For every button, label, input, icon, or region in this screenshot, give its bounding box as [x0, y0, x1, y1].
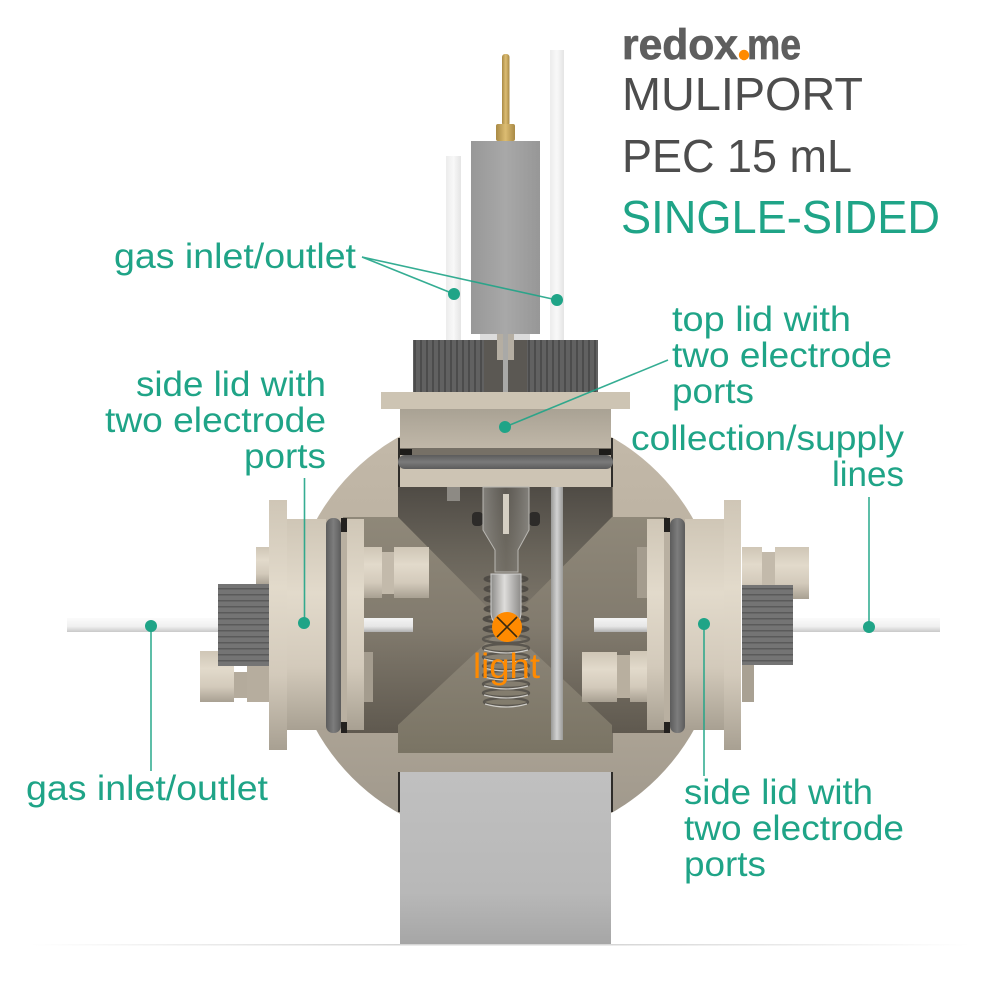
logo: redox.me: redox	[622, 21, 738, 69]
interior chamber	[343, 487, 667, 753]
callout: right side lid	[684, 618, 904, 884]
callout: gas inlet/outlet top	[114, 237, 563, 306]
callout: top lid: two electrode	[672, 336, 892, 375]
callout: collection/supply lines	[631, 419, 905, 633]
callout: gas inlet/outlet left: gas inlet/outlet	[26, 769, 268, 808]
round cell body	[289, 409, 721, 841]
title: product name	[621, 68, 940, 243]
callout: left side lid	[105, 365, 326, 629]
callout: collection/supply lines: collection/supply	[631, 419, 905, 458]
callout: gas inlet/outlet left	[26, 620, 268, 808]
logo: redox.me	[622, 21, 801, 69]
callout: left side lid: ports	[244, 437, 326, 476]
logo: redox.me: me	[747, 21, 801, 69]
callout: left side lid: side lid with	[136, 365, 326, 404]
top knurled knob	[413, 334, 598, 392]
glass electrode holder	[472, 487, 540, 626]
callout: right side lid: two electrode	[684, 809, 904, 848]
title: product name: PEC 15 mL	[622, 130, 852, 182]
spring	[483, 576, 529, 707]
right side lid assembly	[582, 500, 940, 750]
callout: top lid: ports	[672, 372, 754, 411]
ground shadow line	[30, 944, 970, 946]
light marker: light	[473, 647, 540, 686]
vertical rod	[551, 487, 563, 740]
light marker	[473, 612, 540, 686]
top flange and lid	[381, 392, 630, 488]
title: product name: SINGLE-SIDED	[621, 191, 940, 243]
title: product name: MULIPORT	[622, 68, 863, 120]
callout: collection/supply lines: lines	[832, 455, 904, 494]
callout: top lid: top lid with	[672, 300, 851, 339]
top electrode: gold pin and grey cylinder	[471, 54, 540, 341]
callout: left side lid: two electrode	[105, 401, 326, 440]
left side lid assembly	[67, 500, 429, 750]
small stub under lid	[447, 487, 460, 501]
stand block	[398, 772, 613, 944]
callout: right side lid: side lid with	[684, 773, 873, 812]
gas tubes on top	[446, 50, 564, 341]
callout: gas inlet/outlet top: gas inlet/outlet	[114, 237, 356, 276]
callout: top lid	[499, 300, 892, 433]
cell illustration	[67, 50, 940, 944]
callout: right side lid: ports	[684, 845, 766, 884]
